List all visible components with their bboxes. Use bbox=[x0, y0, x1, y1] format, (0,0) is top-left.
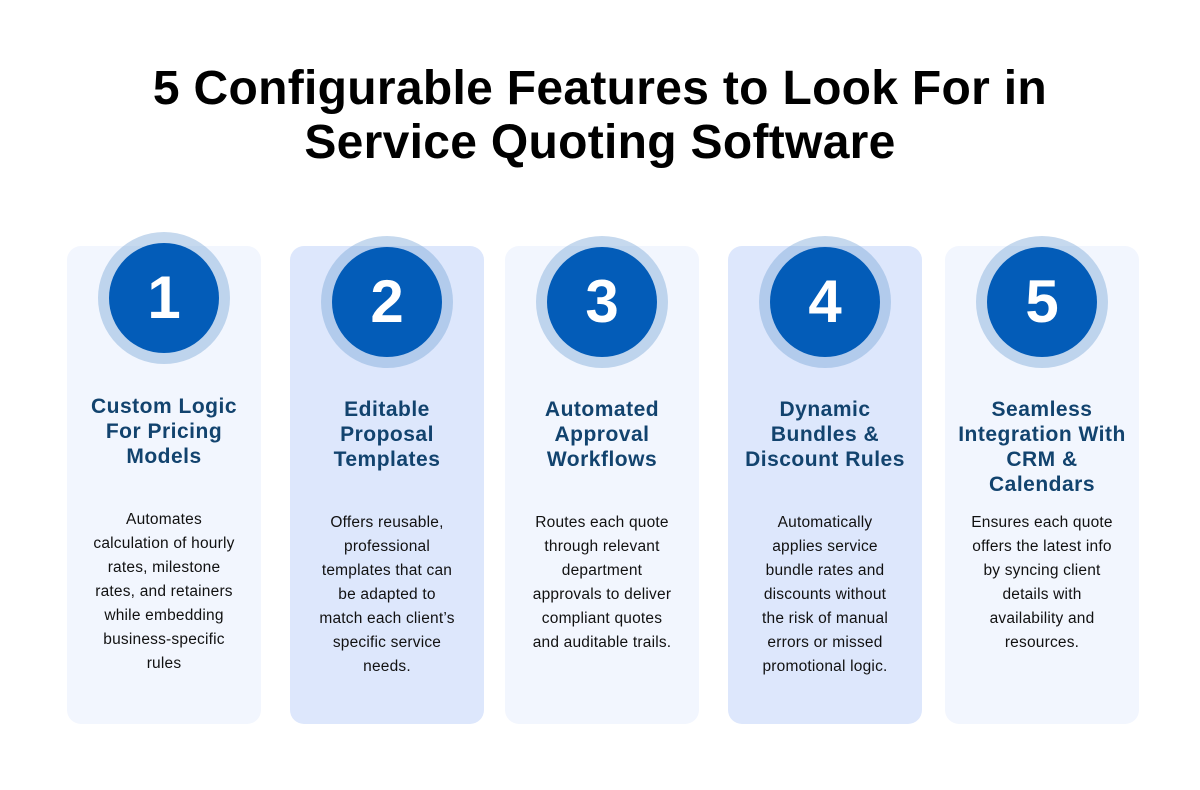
icon: number 5: 5 bbox=[1025, 268, 1059, 335]
text 4: errors or missed bbox=[767, 634, 883, 651]
heading 3: Approval bbox=[554, 423, 650, 446]
heading 4 bbox=[745, 398, 905, 471]
text 1: Automates bbox=[126, 511, 202, 528]
title: 5 Configurable Features to Look For in bbox=[153, 62, 1047, 115]
heading 3: Automated bbox=[545, 398, 659, 421]
text 3: through relevant bbox=[544, 538, 660, 555]
text 3: Routes each quote bbox=[535, 514, 669, 531]
text 3: approvals to deliver bbox=[533, 586, 671, 603]
title bbox=[153, 62, 1047, 169]
icon: number 3 bbox=[536, 236, 668, 368]
heading 2: Editable bbox=[344, 398, 430, 421]
text 1: rules bbox=[147, 655, 181, 672]
heading 1: Custom Logic bbox=[91, 395, 237, 418]
text 5 bbox=[971, 514, 1113, 651]
heading 5 bbox=[958, 398, 1126, 496]
text 5: offers the latest info bbox=[972, 538, 1112, 555]
text 3: compliant quotes bbox=[542, 610, 662, 627]
icon: number 1: 1 bbox=[147, 264, 181, 331]
text 4: discounts without bbox=[764, 586, 886, 603]
panel: card 3 bbox=[505, 246, 699, 724]
text 3 bbox=[533, 514, 671, 651]
text 2: professional bbox=[344, 538, 430, 555]
text 5: Ensures each quote bbox=[971, 514, 1113, 531]
text 1: rates, and retainers bbox=[95, 583, 233, 600]
panel: card 1 bbox=[67, 246, 261, 724]
heading 5: CRM & bbox=[1006, 448, 1078, 471]
heading 4: Dynamic bbox=[779, 398, 871, 421]
heading 2: Proposal bbox=[340, 423, 434, 446]
heading 3 bbox=[545, 398, 659, 471]
panel: card 5 bbox=[945, 246, 1139, 724]
heading 5: Integration With bbox=[958, 423, 1126, 446]
text 1: business-specific bbox=[103, 631, 225, 648]
text 2: specific service bbox=[333, 634, 441, 651]
title: Service Quoting Software bbox=[304, 116, 896, 169]
heading 4: Discount Rules bbox=[745, 448, 905, 471]
text 3: and auditable trails. bbox=[533, 634, 671, 651]
text 1: while embedding bbox=[104, 607, 224, 624]
text 4: bundle rates and bbox=[766, 562, 884, 579]
heading 1 bbox=[91, 395, 237, 468]
icon: number 4 bbox=[759, 236, 891, 368]
text 2: be adapted to bbox=[338, 586, 436, 603]
icon: number 3: 3 bbox=[585, 268, 619, 335]
heading 1: Models bbox=[126, 445, 202, 468]
text 5: by syncing client bbox=[983, 562, 1101, 579]
text 5: details with bbox=[1002, 586, 1082, 603]
text 1 bbox=[93, 511, 235, 672]
text 2: needs. bbox=[363, 658, 411, 675]
heading 2 bbox=[334, 398, 440, 471]
text 2: Offers reusable, bbox=[330, 514, 444, 531]
text 5: resources. bbox=[1005, 634, 1079, 651]
heading 3: Workflows bbox=[547, 448, 657, 471]
icon: number 2: 2 bbox=[370, 268, 404, 335]
heading 1: For Pricing bbox=[106, 420, 222, 443]
icon: number 1 bbox=[98, 232, 230, 364]
text 2: templates that can bbox=[322, 562, 452, 579]
text 2: match each client’s bbox=[319, 610, 455, 627]
text 5: availability and bbox=[990, 610, 1094, 627]
text 4: Automatically bbox=[778, 514, 872, 531]
text 4: promotional logic. bbox=[762, 658, 888, 675]
text 1: calculation of hourly bbox=[93, 535, 235, 552]
text 4: the risk of manual bbox=[762, 610, 888, 627]
heading 5: Calendars bbox=[989, 473, 1095, 496]
heading 4: Bundles & bbox=[771, 423, 879, 446]
icon: number 4: 4 bbox=[808, 268, 842, 335]
text 4: applies service bbox=[772, 538, 878, 555]
icon: number 2 bbox=[321, 236, 453, 368]
icon: number 5 bbox=[976, 236, 1108, 368]
panel: card 2 bbox=[290, 246, 484, 724]
text 2 bbox=[319, 514, 455, 675]
text 3: department bbox=[562, 562, 642, 579]
panel: card 4 bbox=[728, 246, 922, 724]
heading 5: Seamless bbox=[992, 398, 1092, 421]
text 1: rates, milestone bbox=[108, 559, 220, 576]
heading 2: Templates bbox=[334, 448, 440, 471]
text 4 bbox=[762, 514, 888, 675]
